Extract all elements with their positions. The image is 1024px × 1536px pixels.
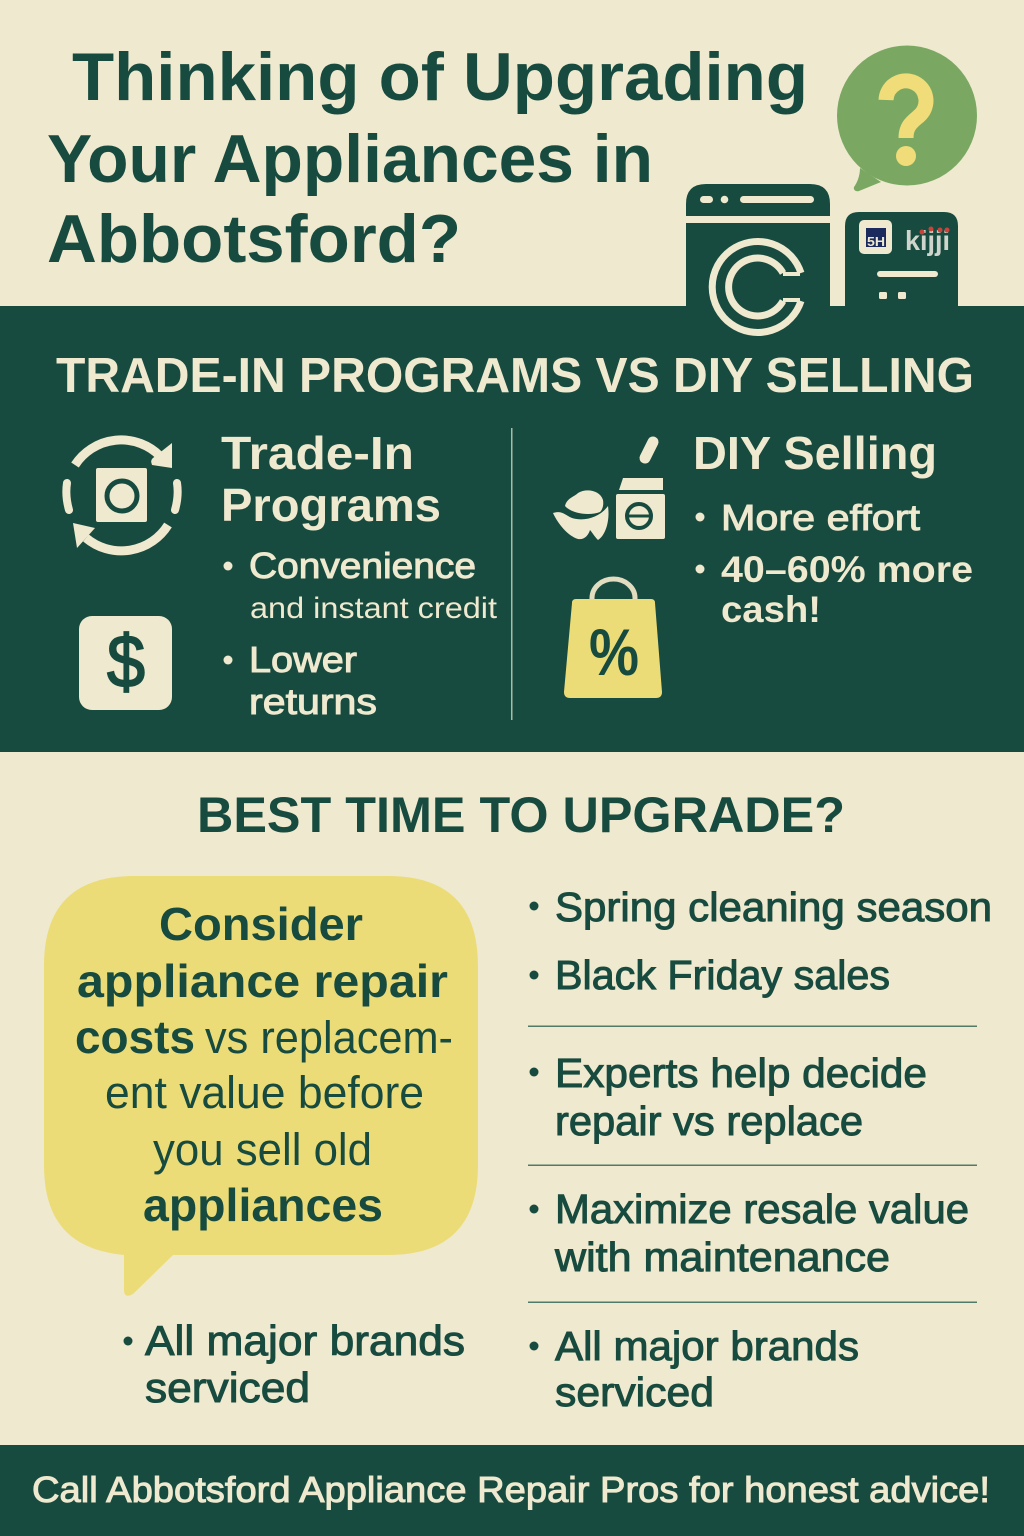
bullet: more effort: More effort — [721, 497, 920, 538]
title: Thinking of Upgrading — [72, 39, 808, 115]
callout: yellow speech bubble: costs — [75, 1011, 195, 1063]
title: Abbotsford? — [47, 201, 461, 277]
panel: DIY selling — [693, 427, 973, 630]
bullet: more cash: cash! — [721, 589, 821, 630]
icon: kijiji tablet: kijji — [905, 225, 950, 256]
bullet: spring cleaning: Spring cleaning season — [555, 884, 992, 930]
icon: percent shopping bag: % — [589, 616, 639, 689]
callout: yellow speech bubble: you sell old — [153, 1124, 372, 1175]
panel: trade-in programs — [221, 427, 498, 722]
bullet: all major brands left: All major brands — [145, 1317, 465, 1364]
callout: yellow speech bubble: appliances — [143, 1179, 383, 1231]
heading: trade-in programs: Programs — [221, 479, 441, 531]
bullet: experts: repair vs replace — [555, 1098, 863, 1144]
bullet: convenience — [224, 545, 498, 625]
bullet: more cash: 40–60% more — [721, 549, 973, 590]
icon: kijiji tablet — [845, 212, 958, 310]
callout: yellow speech bubble — [44, 876, 478, 1296]
bullet: maximize resale: with maintenance — [554, 1234, 890, 1280]
list: upgrade tips — [528, 884, 992, 1415]
heading: best time to upgrade: BEST TIME TO UPGRADE? — [197, 787, 845, 843]
icon: washing machine — [686, 184, 830, 332]
title: Your Appliances in — [47, 121, 653, 197]
bullet: convenience: and instant credit — [250, 592, 498, 625]
icon: dollar tile: $ — [107, 620, 145, 703]
bullet: convenience: Convenience — [249, 545, 476, 586]
footer: call to action — [0, 1445, 1024, 1536]
icon: percent shopping bag — [564, 579, 662, 698]
callout: yellow speech bubble: ent value before — [105, 1067, 424, 1118]
bullet: lower returns — [224, 639, 377, 722]
icon: dollar tile — [79, 616, 172, 710]
footer: call to action: Call Abbotsford Appliance Repair Pros for honest advice! — [32, 1469, 990, 1510]
bullet: all major brands left: serviced — [145, 1364, 310, 1411]
bullet: more cash — [696, 549, 973, 630]
icon: DIY washer and hands — [553, 442, 665, 540]
bullet: black friday: Black Friday sales — [555, 952, 890, 998]
bullet: all major brands right — [530, 1323, 859, 1415]
bullet: all major brands left — [124, 1317, 465, 1411]
heading: trade-in vs DIY: TRADE-IN PROGRAMS VS DIY SELLING — [56, 349, 974, 403]
bullet: maximize resale — [530, 1186, 969, 1280]
bullet: experts — [530, 1050, 927, 1144]
title — [47, 39, 808, 277]
bullet: lower returns: returns — [249, 681, 377, 722]
heading: DIY selling: DIY Selling — [693, 427, 937, 479]
callout: yellow speech bubble: Consider — [159, 898, 363, 950]
bullet: lower returns: Lower — [249, 639, 357, 680]
bullet: experts: Experts help decide — [555, 1050, 927, 1096]
bullet: maximize resale: Maximize resale value — [555, 1186, 969, 1232]
bullet: all major brands right: All major brands — [555, 1323, 859, 1369]
icon: question speech bubble — [837, 46, 977, 191]
heading: trade-in programs — [221, 427, 441, 531]
heading: trade-in programs: Trade-In — [221, 427, 414, 479]
panel: trade-in vs DIY band — [0, 306, 1024, 752]
icon: kijiji tablet: 5H — [867, 234, 885, 249]
icon: trade-in cycle — [66, 440, 178, 551]
bullet: all major brands right: serviced — [555, 1369, 714, 1415]
callout: yellow speech bubble: appliance repair — [77, 955, 448, 1007]
callout: yellow speech bubble: vs replacem- — [205, 1012, 453, 1063]
